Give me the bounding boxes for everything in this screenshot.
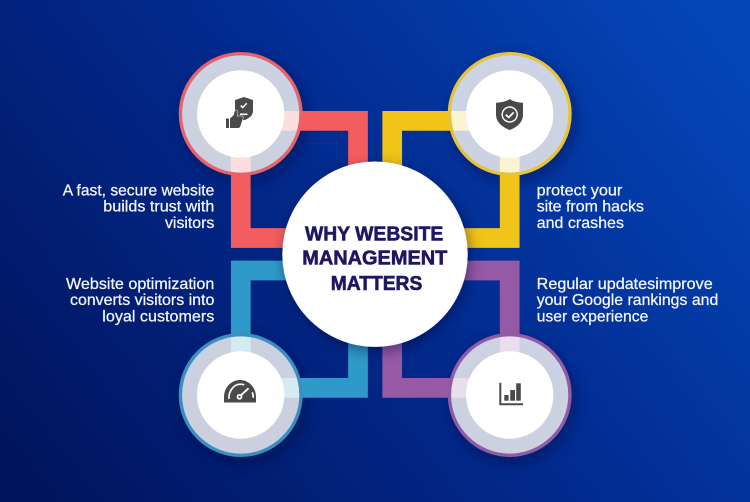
icon: speed gauge xyxy=(224,380,256,402)
title xyxy=(302,224,447,295)
text: optimization: loyal customers xyxy=(102,308,214,326)
text: optimization xyxy=(66,276,214,326)
panel: optimization (blue) xyxy=(66,270,358,455)
circle shadows xyxy=(182,57,575,462)
text: rankings xyxy=(537,276,718,326)
panel: rankings (purple) xyxy=(392,270,718,455)
center circle xyxy=(282,162,468,347)
text: rankings: user experience xyxy=(537,308,648,326)
inner disc: red xyxy=(197,70,284,158)
text: optimization: Website optimization xyxy=(66,276,214,293)
text: optimization: converts visitors into xyxy=(70,292,214,309)
connector: blue xyxy=(241,270,358,395)
panel: trust (red) xyxy=(63,54,358,238)
ring: red xyxy=(180,54,301,174)
text: rankings: your Google rankings and xyxy=(537,292,718,309)
text: protect xyxy=(537,182,644,232)
text: rankings: Regular updatesimprove xyxy=(537,276,713,293)
icon: bar chart xyxy=(499,383,523,405)
text: protect: site from hacks xyxy=(537,199,644,216)
connector: yellow xyxy=(392,114,510,238)
ring: yellow xyxy=(449,54,570,174)
ring: purple xyxy=(449,335,570,455)
text: trust: A fast, secure website xyxy=(63,182,214,200)
connector: red xyxy=(241,114,358,238)
ring: blue xyxy=(180,335,301,455)
text: protect: and crashes xyxy=(537,215,624,232)
connector: purple xyxy=(392,270,510,395)
text: protect: protect your xyxy=(537,182,623,200)
inner disc: yellow xyxy=(466,70,553,158)
icon: shield with thumbs up xyxy=(226,97,253,128)
icon: shield with check xyxy=(496,99,523,130)
text: trust: builds trust with xyxy=(103,199,214,216)
panel: protect (yellow) xyxy=(392,54,644,238)
text: trust: visitors xyxy=(165,215,214,232)
inner disc: purple xyxy=(466,351,553,439)
title: WHY WEBSITE xyxy=(305,224,443,246)
text: trust xyxy=(63,182,214,232)
title: MATTERS xyxy=(331,273,422,295)
inner disc: blue xyxy=(197,351,284,439)
title: MANAGEMENT xyxy=(302,248,447,270)
